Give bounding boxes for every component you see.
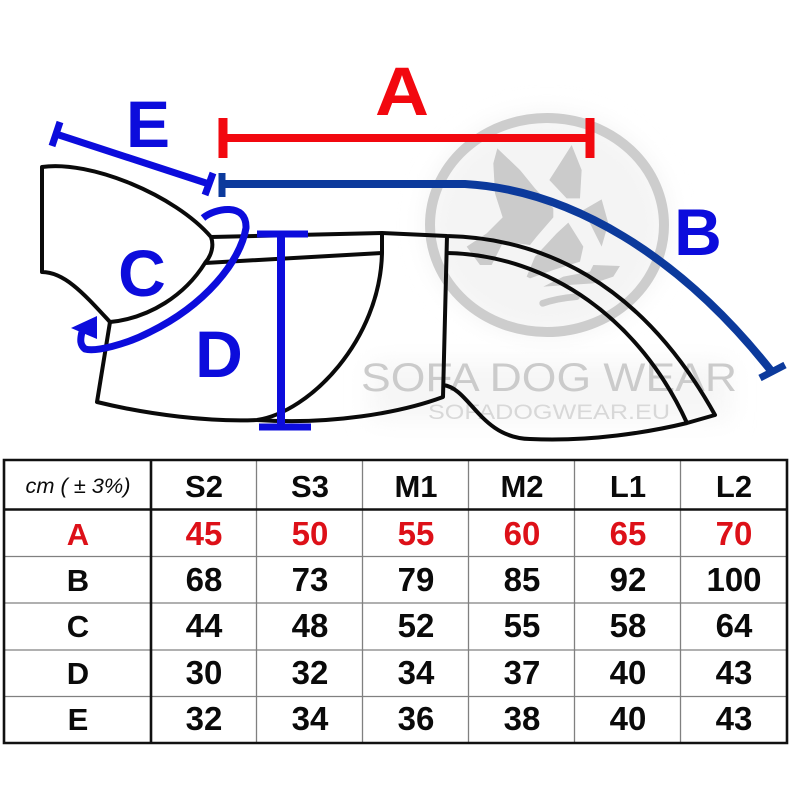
table row C: 58: [610, 607, 646, 644]
table row A: 65: [610, 515, 646, 552]
label C: C: [118, 236, 166, 310]
table header row: S2: [185, 469, 223, 504]
table header row: S3: [291, 469, 329, 504]
table row D: 37: [504, 654, 540, 691]
table row E: 34: [292, 700, 329, 737]
watermark: Sofa Dog Wear logo: SOFADOGWEAR.EU: [428, 401, 670, 424]
table row E: 32: [186, 700, 222, 737]
table row A: A: [67, 517, 89, 552]
table row C: 44: [186, 607, 223, 644]
table header row: cm ( ± 3%): [26, 475, 130, 498]
table row E: [68, 700, 752, 737]
label D: D: [195, 317, 243, 391]
table row A: 70: [716, 515, 752, 552]
table row A: 50: [292, 515, 328, 552]
table header row: M1: [394, 469, 438, 504]
table row D: 32: [292, 654, 328, 691]
table row D: 43: [716, 654, 752, 691]
table row B: 68: [186, 561, 222, 598]
table row B: 85: [504, 561, 540, 598]
table header row: M2: [500, 469, 544, 504]
table row B: 73: [292, 561, 328, 598]
measure C: blue neck arrow: [71, 209, 246, 350]
table row C: 52: [398, 607, 434, 644]
measure B: dark blue curved line: [222, 173, 785, 378]
table row A: 60: [504, 515, 540, 552]
table row C: 64: [716, 607, 753, 644]
table row E: 40: [610, 700, 646, 737]
measure E: blue diagonal line: [52, 122, 213, 195]
table header row: L2: [716, 469, 752, 504]
table row E: 43: [716, 700, 752, 737]
table row A: 45: [186, 515, 222, 552]
table row B: [67, 561, 762, 598]
table row A: [67, 515, 752, 552]
table row C: C: [67, 609, 89, 644]
measure D: blue vertical line: [257, 234, 311, 427]
table row D: D: [67, 656, 89, 691]
measure A: red dimension line: [223, 118, 590, 158]
table row B: 92: [610, 561, 646, 598]
label B: B: [674, 195, 722, 269]
table row B: 100: [706, 561, 762, 598]
watermark: Sofa Dog Wear logo: [361, 113, 737, 424]
table grid: [4, 460, 787, 743]
table row C: 48: [292, 607, 328, 644]
table row D: [67, 654, 752, 691]
label A: A: [375, 53, 429, 130]
table row A: 55: [398, 515, 434, 552]
table row D: 34: [398, 654, 435, 691]
table row D: 30: [186, 654, 222, 691]
table row E: 36: [398, 700, 434, 737]
table row E: E: [68, 702, 88, 737]
table row C: 55: [504, 607, 540, 644]
table row D: 40: [610, 654, 646, 691]
table header row: [26, 469, 752, 504]
table row B: 79: [398, 561, 434, 598]
dog coat outline: [42, 166, 715, 440]
table header row: L1: [610, 469, 646, 504]
watermark: Sofa Dog Wear logo: SOFA DOG WEAR: [361, 356, 737, 400]
table row C: [67, 607, 753, 644]
label E: E: [126, 87, 170, 161]
size table: [4, 460, 787, 743]
table row E: 38: [504, 700, 540, 737]
table row B: B: [67, 563, 89, 598]
